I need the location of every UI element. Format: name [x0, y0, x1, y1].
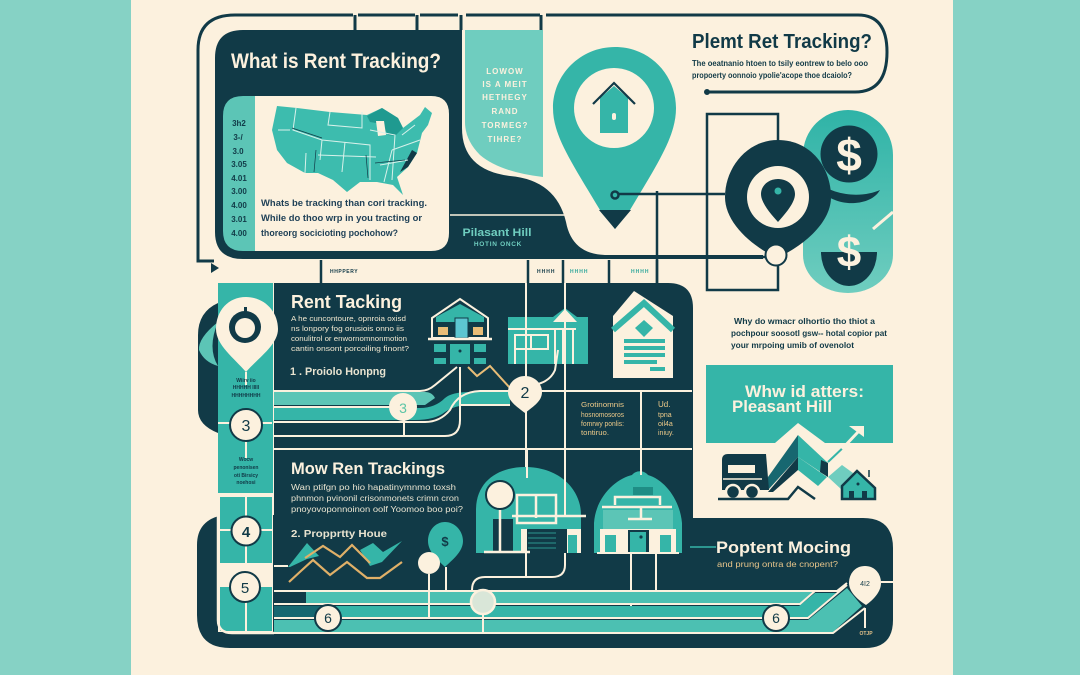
teal question box: HETHEGY — [482, 93, 528, 102]
right teal side band — [953, 0, 1080, 675]
US map — [272, 106, 432, 195]
mountain — [768, 435, 828, 492]
left teal rail with steps — [216, 283, 278, 633]
flow bands upper — [274, 283, 692, 530]
step 6 left: 6 — [324, 610, 332, 626]
panel: rent tracking main — [274, 283, 693, 518]
icon: small house — [828, 465, 875, 500]
bottom flow bands — [274, 574, 865, 633]
card question text: Whats be tracking than cori tracking. — [261, 198, 427, 208]
step 5 — [230, 572, 260, 602]
rail caption lower: noehosi — [236, 480, 256, 486]
banner heading: Whw id atters: — [745, 382, 864, 401]
icon: dollar coin bottom — [821, 228, 877, 286]
rail caption lower: Wocw — [239, 457, 253, 463]
icon: house with siding — [613, 291, 673, 378]
potent moving text — [690, 538, 851, 569]
truck and mountain illustration — [718, 426, 875, 500]
step 3: 3 — [242, 418, 251, 435]
rail caption upper: HHHHHHHH — [232, 393, 261, 399]
gold note columns: tontiruo. — [581, 430, 609, 437]
rail caption lower: oti Birsicy — [234, 473, 258, 479]
step 3 — [230, 409, 262, 441]
paragraph — [291, 314, 409, 353]
small header tabs: HHHH — [570, 269, 588, 275]
gold note columns: Grotinomnis — [581, 402, 625, 409]
why text block — [731, 316, 887, 350]
step 6 left — [315, 605, 341, 631]
left teal side band — [0, 0, 131, 675]
rail caption upper — [232, 378, 261, 399]
line chart — [274, 541, 402, 582]
icon: location pin with ring — [216, 297, 278, 385]
connector lines — [600, 114, 778, 290]
heading: what is rent tracking: What is Rent Tracking? — [231, 50, 441, 73]
gold note columns: oil4a — [658, 421, 673, 428]
panel: what is rent tracking — [215, 30, 763, 259]
heading: plemt ret tracking: Plemt Ret Tracking? — [692, 31, 872, 53]
rail caption upper: HHHHH IIIII — [233, 385, 260, 391]
teal question box: IS A MEIT — [482, 80, 528, 89]
rail caption upper: Wiirv iio — [236, 378, 256, 384]
scale numbers — [231, 119, 247, 238]
pleasant hill label — [450, 215, 567, 248]
small header tabs: HHHH — [631, 269, 649, 275]
heading: mow rent trackings: Mow Ren Trackings — [291, 459, 445, 478]
gold note columns: tpna — [658, 412, 672, 419]
small header tabs: HHHH — [537, 269, 555, 275]
why text block: pochpour soosotl gsw-- hotal copior pat — [731, 328, 887, 338]
why text block: Why do wmacr olhortio tho thiot a — [734, 316, 875, 326]
paragraph: phnmon pvinonil crisonmonets crimn cron — [291, 494, 459, 503]
small header tabs: HHPPERY — [330, 269, 358, 275]
step 4 — [232, 516, 260, 546]
scale numbers: 4.00 — [231, 229, 247, 238]
node 2 — [508, 376, 542, 413]
paragraph: A he cuncontoure, opnroia oxisd — [291, 314, 406, 323]
big location pin with house — [553, 47, 676, 229]
icon: truck — [718, 454, 815, 499]
scale numbers: 3-/ — [233, 133, 243, 142]
rent tracking section text — [290, 292, 409, 378]
icon: dollar pin: $ — [441, 534, 449, 549]
scale numbers: 3.00 — [231, 187, 247, 196]
banner location: Pleasant Hill — [732, 397, 832, 416]
icon: domed house — [594, 450, 682, 617]
teal question box: TORMEG? — [482, 121, 528, 130]
arrow marker — [211, 263, 219, 273]
how rent tracking section text — [291, 459, 464, 540]
icon: dollar pin — [418, 522, 463, 617]
paragraph: conulitrol or enwornomnonmotion — [291, 334, 407, 343]
icon: dollar coin bottom: $ — [837, 228, 861, 277]
icon: domed warehouse — [472, 450, 586, 590]
scale numbers: 3.01 — [231, 215, 247, 224]
growth arrow — [828, 426, 864, 462]
paragraph: Wan ptifgn po hio hapatinymnmo toxsh — [291, 483, 456, 492]
paragraph: cantin onsont porcoiling finont? — [291, 344, 409, 353]
intro text: The oeatnanio htoen to tsily eontrew to belo ooo — [692, 59, 868, 68]
list item 1: 1 . Proiolo Honpng — [290, 366, 386, 378]
step 5: 5 — [241, 580, 249, 597]
paragraph — [291, 483, 464, 514]
scale numbers: 3.0 — [232, 147, 244, 156]
node: flow junction — [471, 590, 495, 614]
gold note columns: Ud. — [658, 400, 670, 409]
gold note columns: hosnomosoros — [581, 412, 624, 419]
why text block: your mrpoing umib of ovenolot — [731, 340, 854, 350]
rail caption lower — [233, 457, 259, 486]
heading: rent tacking: Rent Tacking — [291, 292, 402, 312]
step 6 right: 6 — [772, 610, 780, 626]
teal capsule with dollar icons — [803, 110, 893, 293]
gold note columns: iniuy. — [658, 430, 674, 437]
pleasant hill label: Pilasant Hill — [462, 227, 532, 239]
left rail backing arc — [198, 303, 218, 433]
small end pin: OTJP — [859, 631, 873, 637]
scale numbers: 3.05 — [231, 160, 247, 169]
scale numbers: 4.00 — [231, 201, 247, 210]
rail caption lower: penonisen — [233, 465, 259, 471]
icon: dollar coin top — [820, 126, 878, 182]
icon: dollar coin top: $ — [836, 129, 862, 181]
intro text: propoerty oonnoio ypolie'acope thoe dcaiolo? — [692, 71, 852, 80]
small header tabs — [321, 260, 657, 283]
gold note columns — [581, 400, 674, 437]
icon: storefront — [508, 308, 588, 364]
teal crescent behind pin — [199, 322, 218, 366]
heading: poptent mocing: Poptent Mocing — [716, 538, 851, 557]
teal question box — [465, 30, 543, 177]
small end pin — [849, 566, 893, 637]
why it matters banner — [706, 365, 893, 443]
map card — [223, 96, 449, 251]
subtext: and prung ontra de cnopent? — [717, 560, 839, 569]
card question text: While do thoo wrp in you tracting or — [261, 213, 423, 223]
paragraph: pnoyovoponnoinon oolf Yoomoo boo poi? — [291, 505, 464, 514]
step 4: 4 — [242, 524, 251, 541]
icon: house — [593, 83, 635, 133]
node 3: 3 — [399, 400, 407, 416]
dark map pin node — [725, 140, 831, 266]
step 6 right — [763, 605, 789, 631]
teal question box: RAND — [491, 107, 519, 116]
card question text — [261, 198, 427, 238]
icon: house one — [428, 299, 492, 364]
card question text: thoreorg socicioting pochohow? — [261, 228, 398, 238]
paragraph: ns lonpory fog orusiois onno iis — [291, 324, 404, 333]
gold note columns: fomrwy ponlis: — [581, 421, 624, 428]
list item 2: 2. Propprtty Houe — [291, 528, 387, 540]
bottom dark panel base — [197, 515, 893, 648]
scale numbers: 4.01 — [231, 174, 247, 183]
node 3 — [389, 393, 417, 421]
intro text — [692, 59, 868, 80]
scale numbers: 3h2 — [232, 119, 246, 128]
small end pin: 4I2 — [860, 581, 870, 588]
pleasant hill label: HOTIN ONCK — [474, 241, 522, 248]
teal question box: LOWOW — [486, 67, 524, 76]
teal question box: TIHRE? — [488, 135, 522, 144]
outer frame connector lines — [198, 15, 887, 261]
node 2: 2 — [521, 385, 530, 402]
